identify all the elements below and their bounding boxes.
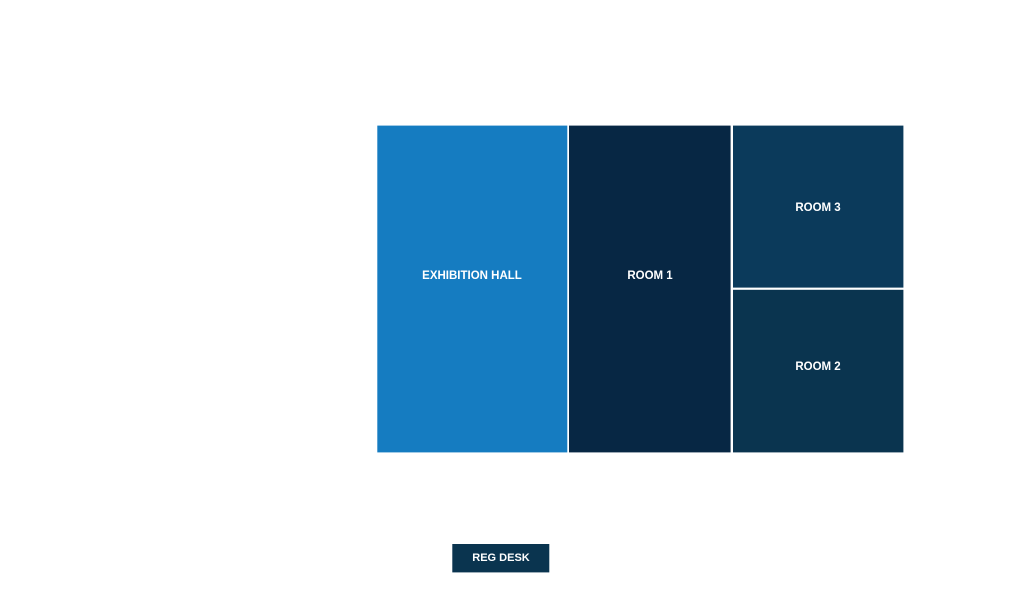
panel: registration desk: REG DESK [472, 552, 530, 564]
panel: room 3: ROOM 3 [795, 202, 841, 214]
panel: room 1: ROOM 1 [627, 270, 673, 282]
panel: room 1 [569, 126, 731, 452]
panel: room 2: ROOM 2 [795, 361, 841, 373]
panel: registration desk [452, 544, 549, 572]
panel: room 3 [733, 126, 903, 288]
panel: exhibition hall [377, 126, 567, 452]
panel: room 2 [733, 290, 903, 452]
panel: exhibition hall: EXHIBITION HALL [422, 270, 522, 282]
